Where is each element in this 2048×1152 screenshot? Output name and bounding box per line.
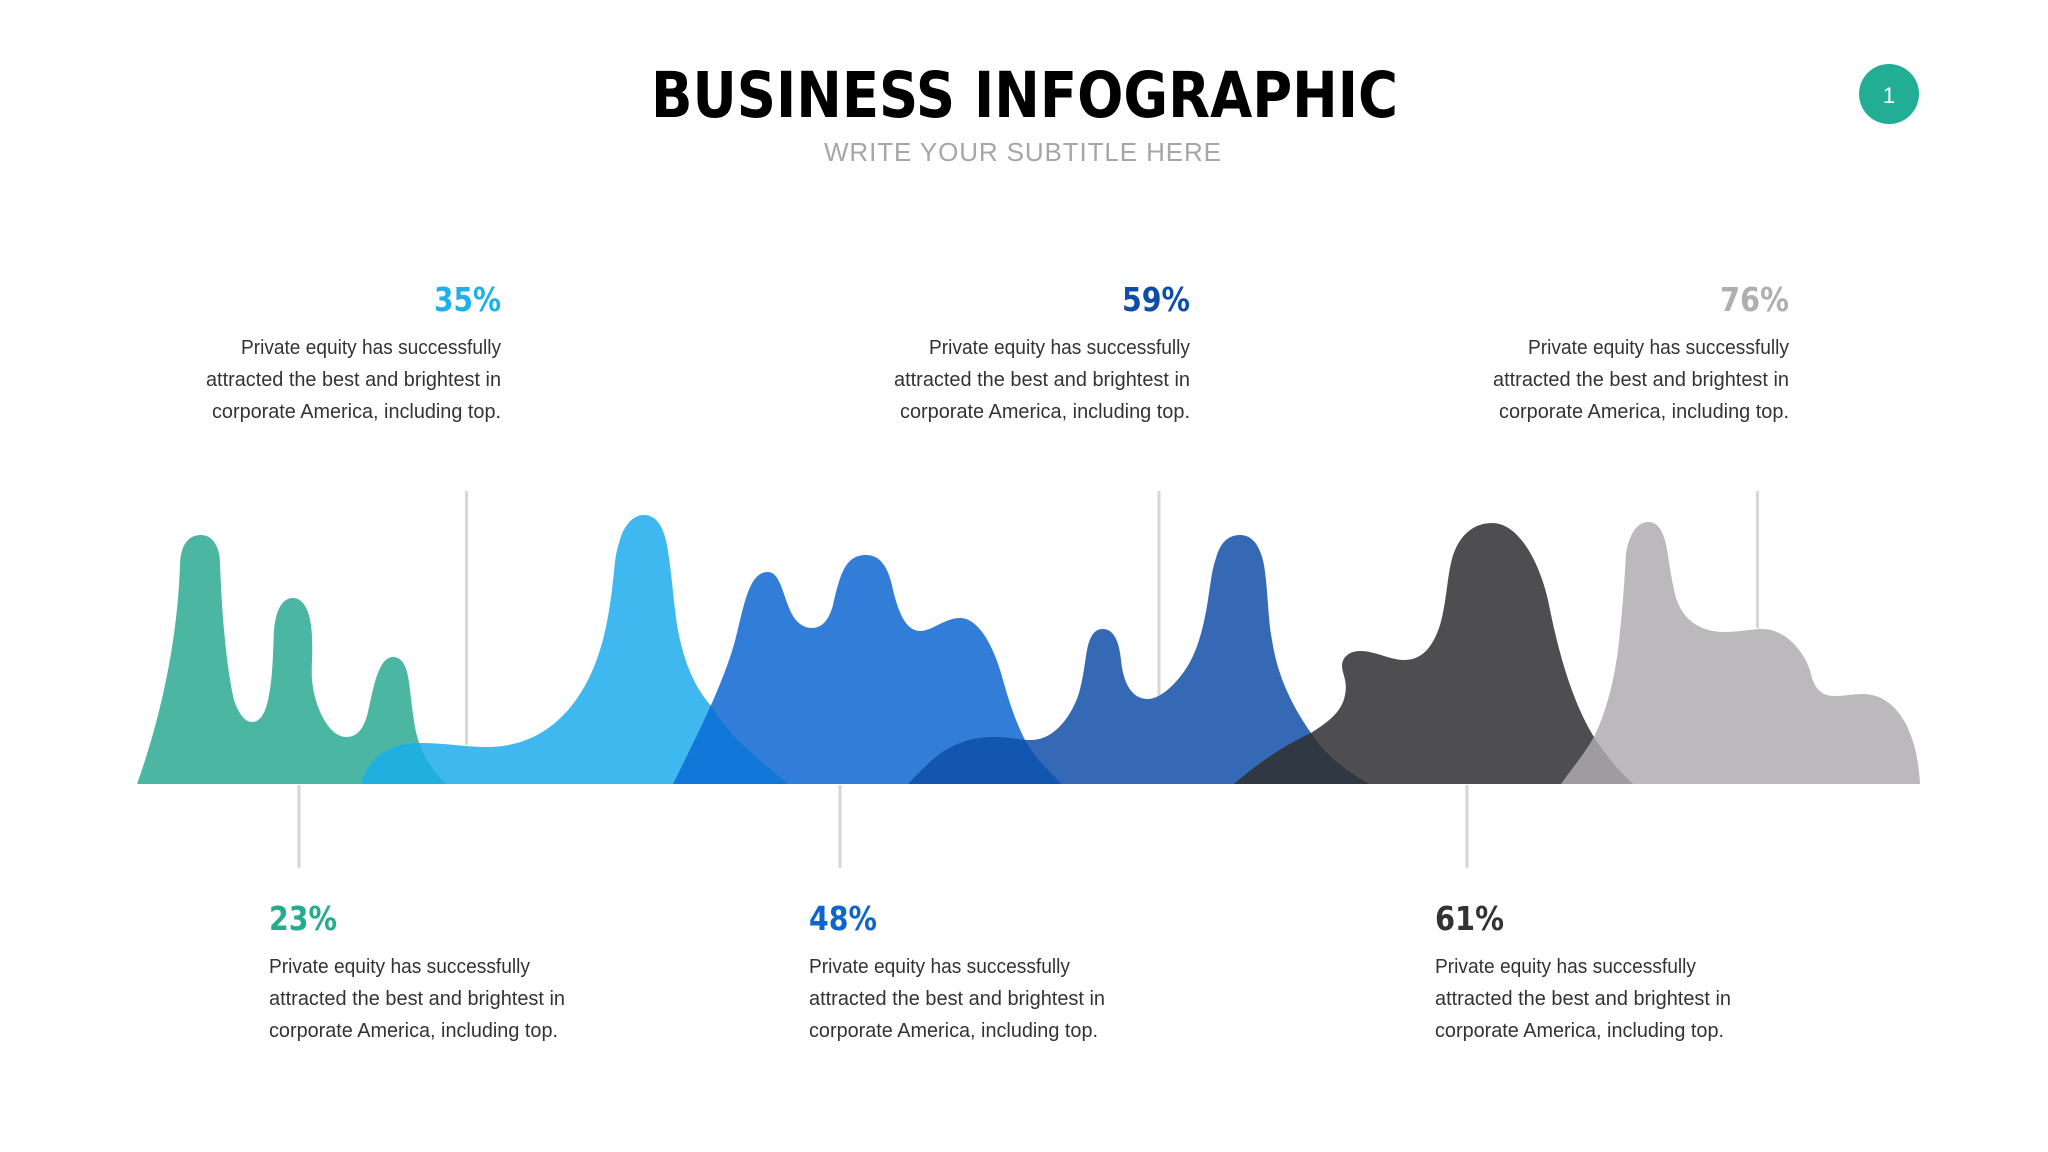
overlap: green and light blue (361, 743, 446, 784)
wave: green 23% (137, 535, 446, 784)
callout: 76% (1493, 280, 1789, 423)
callout: 59%: Private equity has successfully (929, 337, 1190, 359)
wave: grey 76% (1561, 522, 1920, 784)
overlap: charcoal and grey (1562, 737, 1633, 784)
callout: 35%: attracted the best and brightest in (206, 369, 501, 391)
callout: 23%: corporate America, including top. (269, 1020, 558, 1042)
callout: 76%: 76% (1720, 280, 1789, 319)
wave: charcoal 61% (1234, 523, 1633, 784)
callout: 23% (269, 899, 565, 1042)
callout: 76%: attracted the best and brightest in (1493, 369, 1789, 391)
callout: 35% (206, 280, 501, 423)
callout: 61%: attracted the best and brightest in (1435, 988, 1731, 1010)
overlap: light blue and medium blue (673, 706, 788, 784)
callout: 48%: Private equity has successfully (809, 956, 1070, 978)
leader lines (299, 491, 1758, 868)
callout: 61%: 61% (1435, 899, 1504, 938)
callout: 35%: corporate America, including top. (212, 401, 501, 423)
callout: 48%: attracted the best and brightest in (809, 988, 1105, 1010)
page number badge: 1 (1883, 83, 1895, 108)
wave: light blue 35% (361, 515, 788, 784)
overlap: dark blue and charcoal (1234, 733, 1369, 784)
wave: medium blue 48% (673, 555, 1062, 784)
callout: 48%: 48% (809, 899, 877, 938)
callout: 35%: 35% (434, 280, 501, 319)
callout: 23%: Private equity has successfully (269, 956, 530, 978)
overlap: medium blue and dark blue (908, 737, 1062, 784)
callout: 61%: Private equity has successfully (1435, 956, 1696, 978)
callout: 59%: corporate America, including top. (900, 401, 1190, 423)
callout: 59%: 59% (1122, 280, 1190, 319)
callout: 61% (1435, 899, 1731, 1042)
callout: 23%: attracted the best and brightest in (269, 988, 565, 1010)
callout: 48%: corporate America, including top. (809, 1020, 1098, 1042)
page number badge (1859, 64, 1919, 124)
wave: dark blue 59% (908, 535, 1369, 784)
callout: 59% (894, 280, 1190, 423)
callout: 48% (809, 899, 1105, 1042)
callout: 76%: corporate America, including top. (1499, 401, 1789, 423)
title: BUSINESS INFOGRAPHIC (651, 59, 1398, 132)
wave chart (137, 515, 1920, 784)
callout: 76%: Private equity has successfully (1528, 337, 1789, 359)
subtitle: WRITE YOUR SUBTITLE HERE (824, 137, 1221, 167)
callout: 35%: Private equity has successfully (241, 337, 501, 359)
callout: 61%: corporate America, including top. (1435, 1020, 1724, 1042)
callout: 59%: attracted the best and brightest in (894, 369, 1190, 391)
callout: 23%: 23% (269, 899, 337, 938)
